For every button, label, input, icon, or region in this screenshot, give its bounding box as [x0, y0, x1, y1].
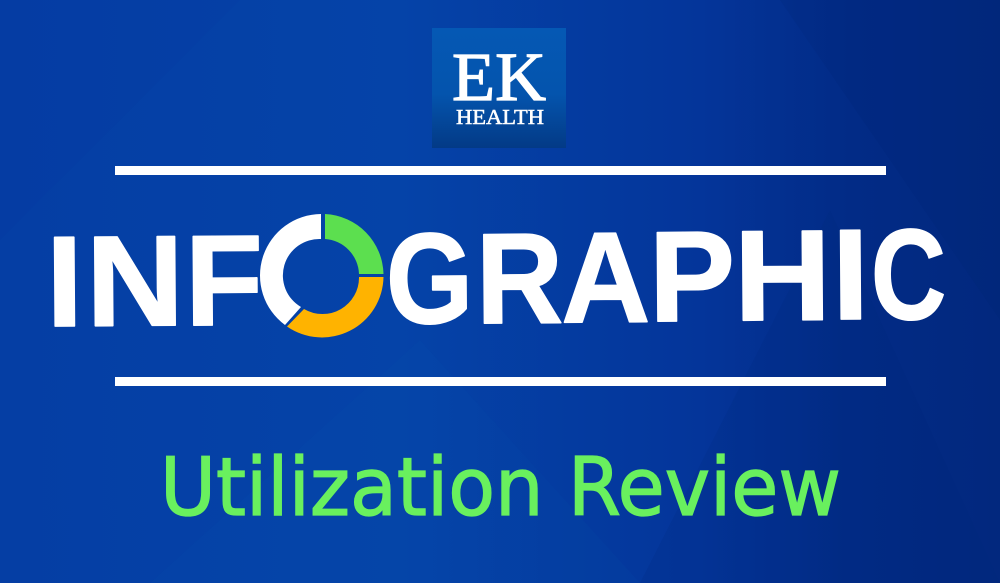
title: INFOGRAPHIC: G: [386, 207, 474, 351]
title: INFOGRAPHIC: P: [649, 205, 736, 349]
donut chart letter O: [260, 214, 384, 337]
title: INFOGRAPHIC: R: [476, 207, 564, 351]
logo: EK Health: [432, 28, 566, 148]
title: INFOGRAPHIC: H: [734, 204, 832, 348]
title: INFOGRAPHIC: I: [46, 210, 84, 354]
bottom divider: [115, 377, 886, 386]
title: INFOGRAPHIC: F: [185, 209, 264, 353]
top divider: [115, 166, 886, 175]
title: INFOGRAPHIC: [46, 203, 947, 354]
title: INFOGRAPHIC: I: [832, 203, 870, 347]
title: INFOGRAPHIC: N: [86, 209, 185, 354]
subtitle: Utilization Review: [160, 441, 841, 534]
logo: EK Health: HEALTH: [456, 105, 544, 129]
title: INFOGRAPHIC: C: [871, 203, 947, 347]
title: INFOGRAPHIC: A: [561, 206, 651, 350]
logo: EK Health: EK: [452, 39, 546, 115]
